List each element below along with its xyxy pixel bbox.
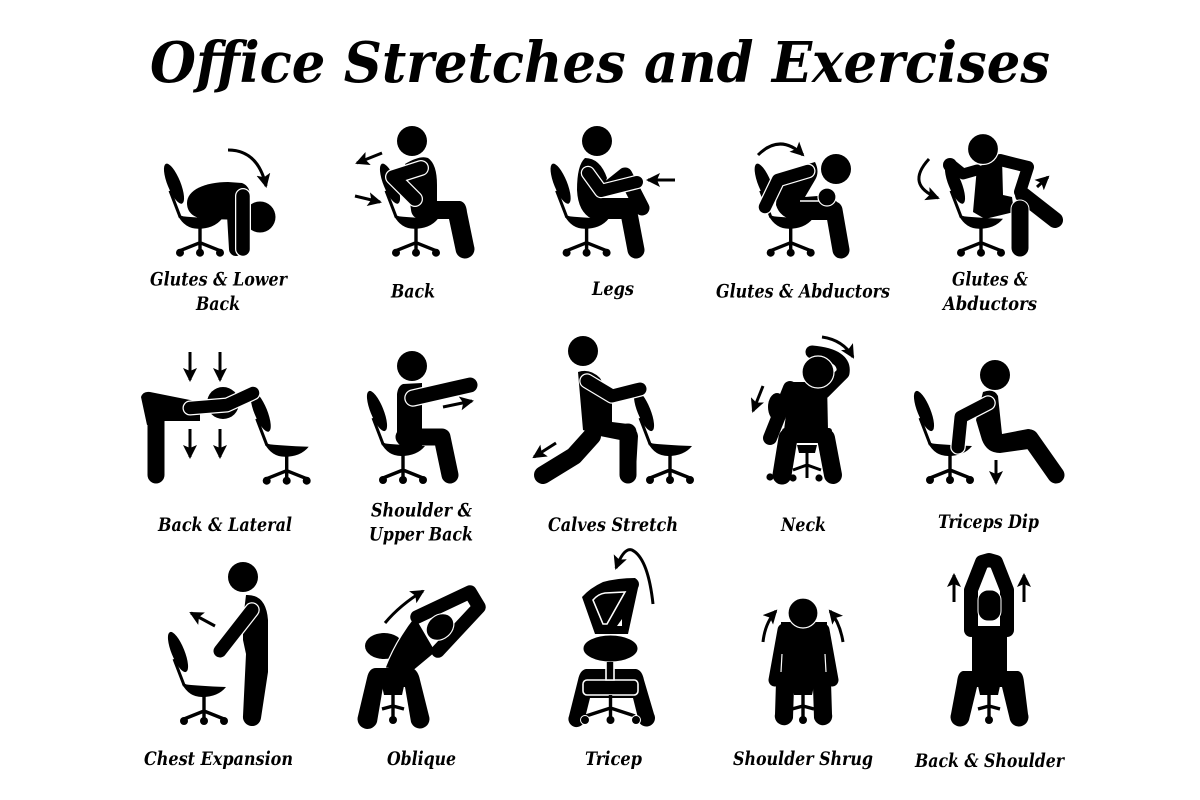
exercise: glutes and abductors, knee raise	[716, 144, 890, 303]
exercise: glutes and lower back	[150, 150, 289, 315]
label: Shoulder Shrug	[733, 748, 873, 770]
icon: chair rear view	[766, 393, 823, 482]
exercise: shoulder shrug	[733, 598, 873, 770]
icon: stool	[978, 686, 1000, 724]
icon: chair	[547, 161, 611, 257]
label: Glutes & Abductors	[716, 281, 890, 303]
exercise: calves stretch	[534, 336, 694, 536]
icon: chair	[247, 389, 311, 485]
arrows: pressing down	[190, 352, 220, 457]
arrow: down left	[534, 443, 556, 457]
icon: figure bending sideways	[358, 592, 479, 729]
arrow: right	[443, 401, 472, 407]
exercise: back and lateral	[141, 352, 311, 536]
icon: figure bending forward	[141, 387, 253, 475]
arrow: out	[357, 153, 382, 163]
icon: figure seen from behind, arm over head	[568, 578, 655, 727]
icon: leaning figure	[765, 154, 851, 250]
arrow: in	[355, 196, 380, 202]
icon: lunging figure	[543, 336, 640, 475]
label	[150, 269, 289, 315]
label: Back	[195, 293, 240, 315]
arrow: right up	[830, 611, 843, 642]
icon: standing figure	[220, 562, 268, 726]
label: Glutes & Lower	[150, 269, 289, 291]
exercise: back	[355, 126, 474, 303]
icon: chair base	[580, 695, 640, 724]
label: Back & Shoulder	[914, 750, 1066, 772]
exercise: shoulder and upper back	[363, 351, 473, 546]
arrow: curved up right	[385, 591, 423, 623]
arrow: up right	[1037, 177, 1048, 187]
icon: seated figure pulling knee	[393, 126, 474, 258]
label: Shoulder &	[371, 500, 473, 522]
exercise: triceps dip	[910, 360, 1056, 533]
label: Tricep	[585, 748, 642, 770]
label: Chest Expansion	[144, 748, 293, 770]
label: Neck	[780, 514, 826, 536]
arrow: left	[648, 178, 675, 182]
label	[941, 269, 1037, 315]
icon: chair	[376, 161, 440, 257]
exercise: tricep	[568, 550, 655, 770]
arrow: curved down	[228, 150, 266, 186]
icon: chair	[164, 630, 228, 725]
icon: chair back	[365, 633, 403, 659]
arrow: left up	[952, 575, 956, 602]
exercise: legs	[547, 126, 675, 300]
exercise: neck	[753, 337, 853, 536]
icon: chair	[630, 389, 694, 484]
label: Calves Stretch	[548, 514, 678, 536]
label: Back & Lateral	[157, 514, 292, 536]
arrow: curved left	[919, 159, 938, 198]
arrow: curved over	[758, 144, 803, 155]
arrow: big curve back	[616, 550, 653, 604]
icon: chair	[751, 161, 815, 257]
label: Oblique	[387, 748, 456, 770]
exercise: glutes and abductors, twist	[919, 134, 1055, 315]
exercise: back and shoulder	[914, 560, 1066, 772]
arrow: down	[994, 460, 998, 483]
icon: chair	[910, 389, 974, 484]
label: Legs	[591, 278, 634, 300]
exercise: chest expansion	[144, 562, 293, 770]
arrow: left up	[763, 611, 776, 642]
icon: seated figure reaching forward	[397, 351, 470, 475]
icon: bent over figure	[187, 182, 276, 249]
icon: seated figure hugging knee	[577, 126, 642, 250]
icon: twisting figure with crossed leg	[943, 134, 1055, 248]
arrow: curved right	[822, 337, 853, 357]
label: Abductors	[941, 293, 1037, 315]
icon: figure tilting head	[770, 352, 843, 475]
label: Triceps Dip	[938, 511, 1039, 533]
icon: chair	[363, 389, 427, 484]
icon: front figure with arms raised	[951, 560, 1028, 726]
icon: chair	[160, 161, 224, 257]
label	[369, 500, 473, 546]
icon: stool	[792, 686, 814, 724]
icon: figure dipping	[958, 360, 1056, 475]
label: Upper Back	[369, 524, 473, 546]
arrow: up left	[191, 613, 215, 626]
arrow: down left	[753, 386, 763, 411]
title: Office Stretches and Exercises	[150, 30, 1050, 96]
exercise: oblique	[358, 591, 479, 770]
icon: front figure shrugging	[775, 598, 832, 725]
label: Glutes &	[952, 269, 1029, 291]
arrow: right up	[1022, 575, 1026, 602]
icon: stool	[382, 686, 404, 724]
label: Back	[390, 281, 435, 303]
icon: chair	[941, 161, 1005, 257]
